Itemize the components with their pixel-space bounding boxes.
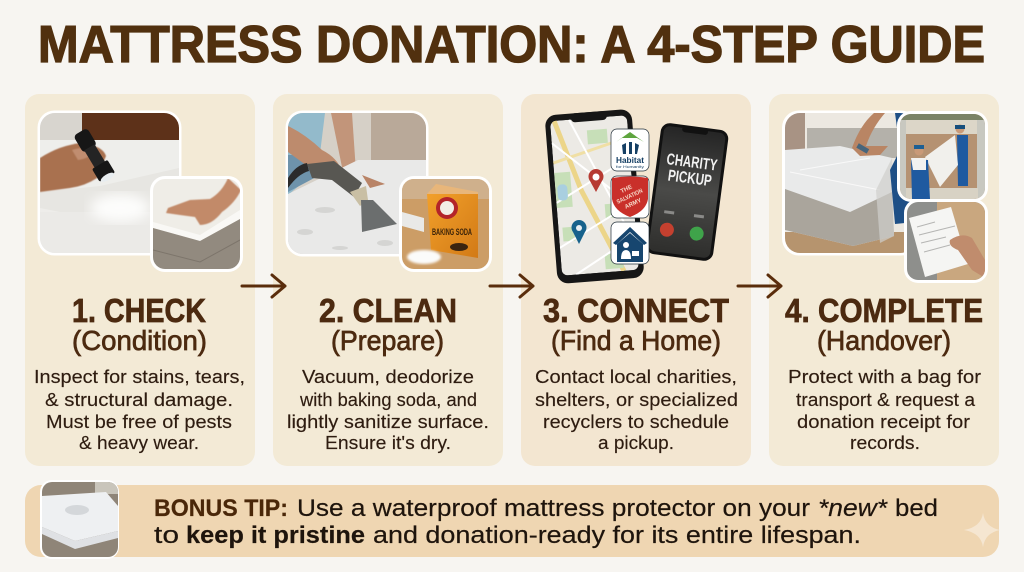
- photo: bagging mattress: [782, 110, 918, 256]
- bonus tip text: *new*: [818, 495, 888, 522]
- panel: bonus tip: [25, 480, 1000, 559]
- body text: Must be free of pests: [46, 411, 232, 432]
- logo: Habitat: Habitat: [616, 156, 644, 165]
- body text: recyclers to schedule: [543, 411, 729, 432]
- bonus tip text: Use a waterproof mattress protector on your: [297, 495, 810, 522]
- photo: flashlight inspecting mattress: [38, 110, 182, 256]
- body text: [535, 366, 738, 453]
- icon: red map pin: [589, 169, 604, 192]
- heading: 4. COMPLETE: [785, 292, 983, 329]
- logo: Salvation Army: THE: [620, 184, 633, 195]
- body text: [788, 366, 981, 453]
- photo: mattress protector: [40, 480, 119, 559]
- call screen text: CHARITY: [665, 151, 718, 175]
- body text: Vacuum, deodorize: [302, 366, 474, 387]
- arrow: step 1 to 2: [242, 275, 285, 297]
- heading: 2. CLEAN: [319, 292, 457, 329]
- call screen text: [663, 151, 718, 191]
- logo: Habitat: for Humanity: [616, 165, 644, 169]
- body text: lightly sanitize surface.: [287, 411, 489, 432]
- body text: Ensure it's dry.: [325, 432, 451, 453]
- subheading: (Prepare): [331, 325, 444, 356]
- photo: movers with truck: [897, 111, 988, 202]
- heading: 3. CONNECT: [543, 292, 729, 329]
- panel: step 3 connect: [521, 94, 751, 466]
- body text: Inspect for stains, tears,: [34, 366, 245, 387]
- body text: [34, 366, 245, 453]
- photo: donation receipt: [904, 199, 988, 283]
- body text: records.: [850, 432, 920, 453]
- photo: vacuuming mattress: [286, 110, 428, 256]
- photo: hand pressing mattress: [150, 176, 243, 272]
- panel: step 2 clean: [273, 94, 503, 466]
- bonus tip text: BONUS TIP:: [154, 495, 288, 522]
- logo: shelter home: [611, 222, 649, 264]
- photo: baking soda box: BAKING SODA: [432, 227, 472, 237]
- heading: 1. CHECK: [72, 292, 206, 329]
- body text: a pickup.: [598, 432, 674, 453]
- bonus tip text: and donation-ready for its entire lifespan.: [373, 522, 861, 549]
- bonus tip text: to: [154, 522, 179, 549]
- subheading: (Handover): [817, 325, 951, 356]
- logo: Habitat: [611, 129, 649, 171]
- panel: step 4 complete: [769, 94, 999, 466]
- body text: donation receipt for: [797, 411, 970, 432]
- icon: sparkle: [964, 513, 1000, 547]
- icon: blue map pin: [572, 220, 586, 244]
- card background: [25, 94, 255, 466]
- arrow: step 2 to 3: [490, 275, 533, 297]
- subheading: (Condition): [72, 325, 207, 356]
- subheading: (Find a Home): [551, 325, 721, 356]
- card background: [521, 94, 751, 466]
- body text: with baking soda, and: [299, 389, 477, 410]
- bonus tip text: [154, 495, 938, 549]
- card background: [273, 94, 503, 466]
- panel: step 1 check: [25, 94, 255, 466]
- title: MATTRESS DONATION: A 4-STEP GUIDE: [38, 16, 985, 74]
- banner background: [25, 485, 999, 557]
- body text: Contact local charities,: [535, 366, 737, 387]
- logo: Salvation Army: ARMY: [624, 198, 643, 211]
- bonus tip text: bed: [895, 495, 938, 522]
- body text: shelters, or specialized: [535, 389, 738, 410]
- body text: transport & request a: [796, 389, 976, 410]
- body text: [287, 366, 489, 453]
- call screen text: PICKUP: [667, 167, 713, 190]
- body text: & heavy wear.: [79, 432, 199, 453]
- bonus tip text: keep it pristine: [186, 522, 365, 549]
- card background: [769, 94, 999, 466]
- icon: map phone: [545, 109, 645, 284]
- icon: call phone: [645, 122, 729, 262]
- logo: Salvation Army: [611, 176, 649, 218]
- body text: & structural damage.: [45, 389, 233, 410]
- body text: Protect with a bag for: [788, 366, 981, 387]
- photo: baking soda box: [399, 176, 492, 272]
- arrow: step 3 to 4: [738, 275, 781, 297]
- logo: Salvation Army: SALVATION: [616, 188, 644, 206]
